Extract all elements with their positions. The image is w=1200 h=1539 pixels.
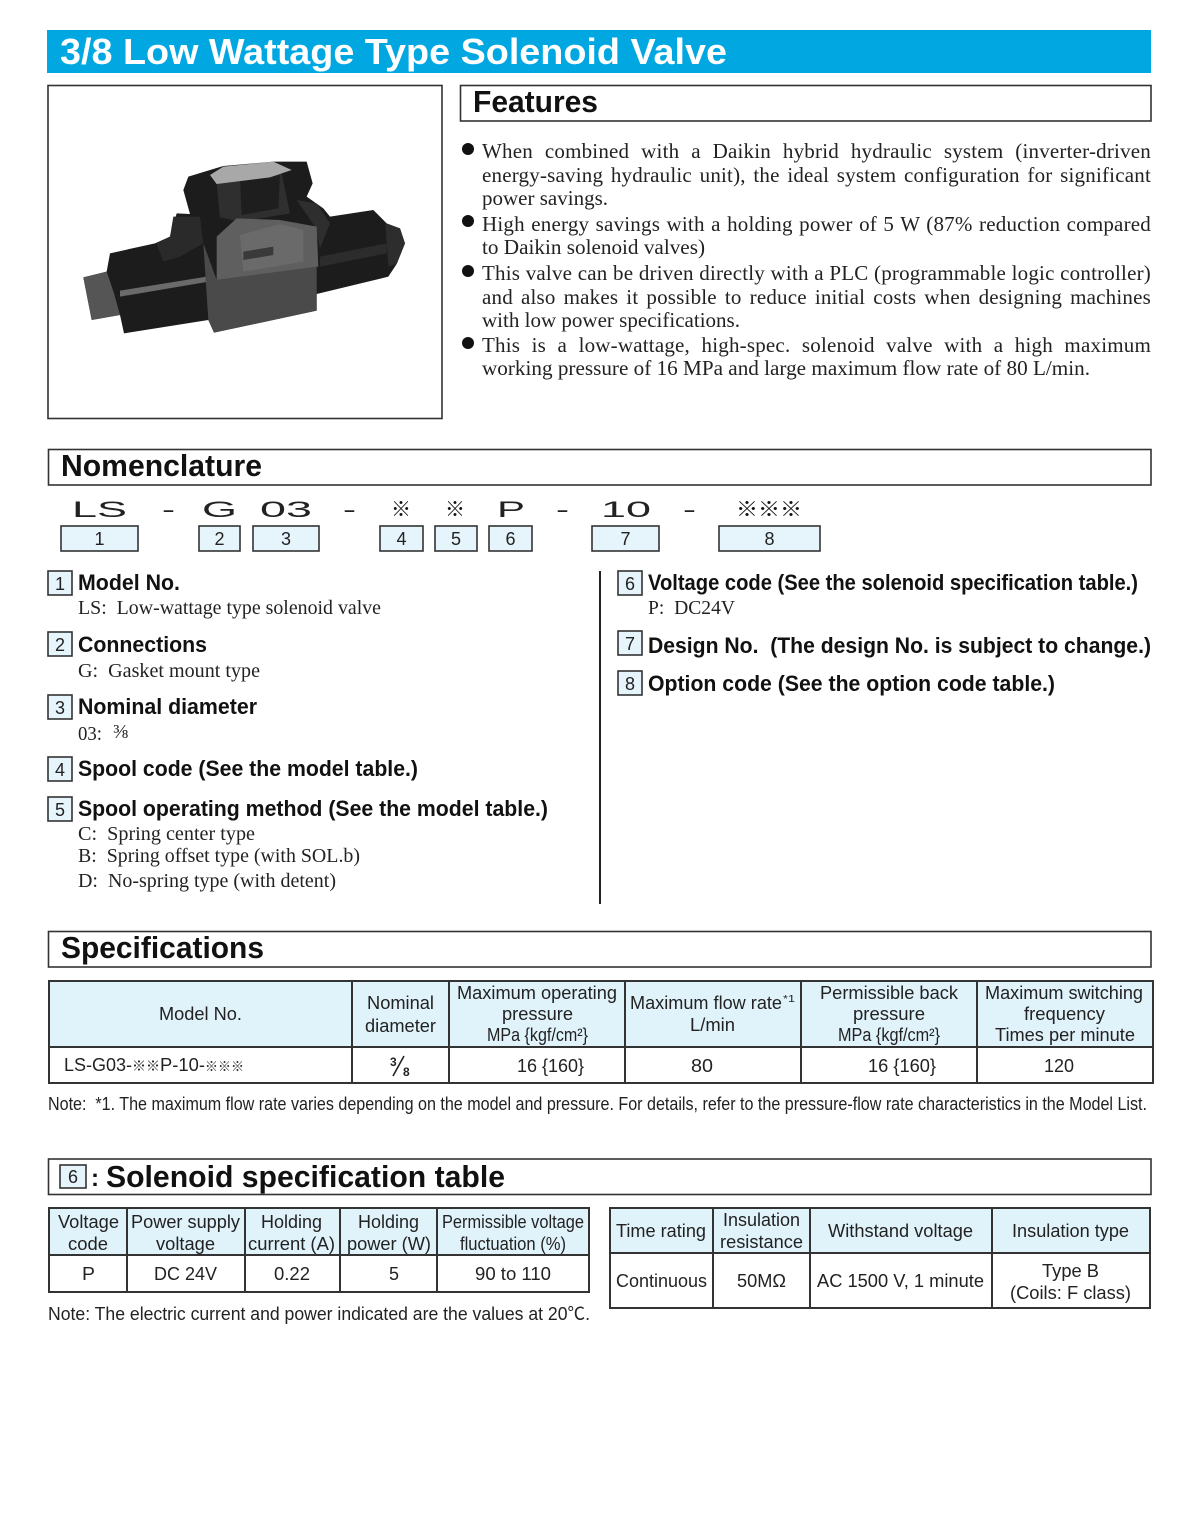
model code diagram: 7 — [620, 529, 631, 549]
table: specifications: Times per minute — [995, 1025, 1135, 1045]
note: current and power: Note: The electric current and power indicated are the values at 20℃. — [48, 1304, 590, 1324]
model code diagram: ※ — [391, 499, 411, 521]
table: specifications: 80 — [691, 1056, 713, 1076]
table: specifications: Nominal — [367, 993, 434, 1013]
table: solenoid insulation: Withstand voltage — [828, 1221, 973, 1241]
heading: Features — [460, 84, 1151, 121]
title banner — [47, 30, 1151, 73]
table: solenoid electrical: P — [82, 1264, 95, 1284]
text block: feature list: working pressure of 16 MPa and large maximum flow rate of 80 L/min. — [482, 356, 1090, 380]
table: solenoid insulation — [610, 1208, 1150, 1308]
item 3: nominal diameter: ⅜ — [113, 722, 128, 743]
model code diagram: ※※※ — [736, 499, 802, 521]
fraction: 3/8 — [390, 1055, 410, 1079]
item 7: design no: 7 — [625, 634, 635, 654]
table: solenoid electrical: 0.22 — [274, 1264, 310, 1284]
table: specifications: diameter — [365, 1016, 436, 1036]
item 6: voltage code: P: DC24V — [648, 598, 735, 619]
model code diagram: - — [343, 497, 356, 522]
table: solenoid insulation: 50MΩ — [737, 1271, 786, 1291]
item 1: model no: Model No. — [78, 570, 180, 595]
model code diagram: P — [497, 497, 525, 522]
model number cell: P-10- — [160, 1055, 205, 1075]
model code diagram: G — [202, 497, 237, 522]
table: specifications: Model No. — [159, 1004, 242, 1024]
item 3: nominal diameter — [48, 694, 257, 745]
item 5: spool operating method — [48, 796, 548, 892]
table: solenoid insulation: (Coils: F class) — [1010, 1283, 1131, 1303]
table: specifications: Maximum operating — [457, 983, 617, 1003]
table: specifications: frequency — [1024, 1004, 1105, 1024]
item 5: spool operating method: D: No-spring type (with detent) — [78, 871, 336, 892]
text block: feature list — [462, 139, 1151, 380]
text block: feature list: and also makes it possible to reduce initial costs when designing machines — [482, 285, 1151, 309]
text block: feature list: to Daikin solenoid valves) — [482, 235, 705, 259]
table: solenoid insulation: Insulation — [723, 1210, 800, 1230]
model code diagram: - — [556, 497, 569, 522]
text block: feature list: This valve can be driven directly with a PLC (programmable logic controller) — [482, 261, 1151, 285]
title banner: 3/8 Low Wattage Type Solenoid Valve — [60, 31, 727, 72]
text block: feature list: power savings. — [482, 186, 608, 210]
item 3: nominal diameter: 03: — [78, 724, 102, 745]
table: solenoid electrical: power (W) — [347, 1234, 431, 1254]
table: specifications: Maximum flow rate — [630, 993, 782, 1013]
text block: feature list: This is a low-wattage, high-spec. solenoid valve with a high maximum — [482, 333, 1151, 357]
item 5: spool operating method: 5 — [55, 800, 65, 820]
item 3: nominal diameter: Nominal diameter — [78, 694, 257, 719]
item 3: nominal diameter: 3 — [55, 698, 65, 718]
table: solenoid electrical: Permissible voltage — [442, 1212, 584, 1232]
fraction: 3/8: 3 — [390, 1055, 397, 1069]
table: solenoid insulation: Continuous — [616, 1271, 707, 1291]
item 6: voltage code: Voltage code (See the solenoid specification table.) — [648, 570, 1138, 595]
model code diagram: 3 — [281, 529, 291, 549]
heading: Solenoid specification table: Solenoid specification table — [106, 1159, 505, 1194]
table: solenoid insulation: AC 1500 V, 1 minute — [817, 1271, 984, 1291]
table: specifications: Maximum switching — [985, 983, 1143, 1003]
item 5: spool operating method: Spool operating method (See the model table.) — [78, 796, 548, 821]
text block: feature list: When combined with a Daikin hybrid hydraulic system (inverter-driven — [482, 139, 1151, 163]
item 7: design no: Design No. (The design No. is subject to change.) — [648, 633, 1151, 658]
table: solenoid electrical: Voltage — [58, 1212, 119, 1232]
item 5: spool operating method: B: Spring offset type (with SOL.b) — [78, 846, 360, 867]
table: solenoid insulation: Type B — [1042, 1261, 1099, 1281]
table: solenoid electrical: Holding — [358, 1212, 419, 1232]
table: solenoid insulation: resistance — [720, 1232, 803, 1252]
table: solenoid electrical: 90 to 110 — [475, 1264, 551, 1284]
table: solenoid electrical: current (A) — [248, 1234, 335, 1254]
table: solenoid electrical: Holding — [261, 1212, 322, 1232]
model number cell: LS-G03- — [64, 1055, 132, 1075]
item 2: connections: Connections — [78, 632, 207, 657]
table: specifications: 16 {160} — [517, 1056, 584, 1076]
table: specifications — [49, 981, 1153, 1083]
item 4: spool code: Spool code (See the model table.) — [78, 756, 418, 781]
table: specifications: *1 — [783, 994, 796, 1005]
heading: Specifications — [48, 930, 1151, 967]
item 6: voltage code: 6 — [625, 574, 635, 594]
table: specifications: pressure — [502, 1004, 573, 1024]
model code diagram: 1 — [94, 529, 105, 549]
heading: Features: Features — [473, 84, 598, 119]
item 5: spool operating method: C: Spring center type — [78, 824, 255, 845]
table: specifications: L/min — [690, 1015, 735, 1035]
heading: Solenoid specification table: 6 — [68, 1167, 78, 1187]
text block: feature list: energy-saving hydraulic unit), the ideal system configuration for significant — [482, 163, 1151, 187]
item 1: model no: 1 — [55, 574, 65, 594]
panel: product photo — [48, 86, 442, 418]
text block: feature list: High energy savings with a holding power of 5 W (87% reduction compared — [482, 212, 1151, 236]
item 2: connections: G: Gasket mount type — [78, 661, 260, 682]
model code diagram: 8 — [764, 529, 775, 549]
table: solenoid electrical: voltage — [156, 1234, 215, 1254]
heading: Solenoid specification table — [48, 1159, 1151, 1194]
item 4: spool code: 4 — [55, 760, 65, 780]
table: solenoid insulation: Insulation type — [1012, 1221, 1129, 1241]
model number cell — [64, 1055, 244, 1075]
text block: feature list: with low power specifications. — [482, 308, 740, 332]
model code diagram: 6 — [505, 529, 516, 549]
item 1: model no: LS: Low-wattage type solenoid valve — [78, 598, 381, 619]
model number cell: ※※ — [132, 1058, 160, 1074]
table: specifications: MPa {kgf/cm²} — [487, 1025, 588, 1045]
item 8: option code: Option code (See the option code table.) — [648, 671, 1055, 696]
model code diagram: 03 — [260, 497, 312, 522]
heading: Specifications: Specifications — [61, 930, 264, 965]
model code diagram: ※ — [445, 499, 465, 521]
model code diagram: - — [683, 497, 696, 522]
table: specifications: MPa {kgf/cm²} — [838, 1025, 940, 1045]
heading: Nomenclature: Nomenclature — [61, 448, 262, 483]
model code diagram: - — [162, 497, 175, 522]
table: specifications: Permissible back — [820, 983, 959, 1003]
model code diagram: 2 — [214, 529, 225, 549]
icon: solenoid valve — [83, 162, 405, 333]
table: solenoid electrical: Power supply — [131, 1212, 240, 1232]
table: solenoid electrical: 5 — [389, 1264, 399, 1284]
model code diagram — [61, 497, 820, 551]
item 6: voltage code — [618, 570, 1138, 619]
item 2: connections — [48, 632, 260, 682]
table: specifications: pressure — [853, 1004, 925, 1024]
item 8: option code: 8 — [625, 674, 635, 694]
model code diagram: LS — [72, 497, 127, 522]
table: solenoid electrical: DC 24V — [154, 1264, 217, 1284]
table: specifications: 120 — [1044, 1056, 1074, 1076]
table: solenoid electrical: fluctuation (%) — [460, 1234, 566, 1254]
table: solenoid electrical — [49, 1208, 589, 1292]
fraction: 3/8: 8 — [403, 1065, 410, 1079]
table: solenoid insulation: Time rating — [616, 1221, 706, 1241]
model code diagram: 4 — [396, 529, 407, 549]
item 1: model no — [48, 570, 381, 619]
model code diagram: 10 — [601, 497, 651, 522]
heading: Nomenclature — [48, 448, 1151, 485]
table: specifications: 16 {160} — [868, 1056, 936, 1076]
model number cell: ※※※ — [205, 1059, 244, 1074]
model code diagram: 5 — [451, 529, 461, 549]
heading: Solenoid specification table: : — [91, 1165, 99, 1192]
table: solenoid electrical: code — [68, 1234, 108, 1254]
item 2: connections: 2 — [55, 635, 65, 655]
